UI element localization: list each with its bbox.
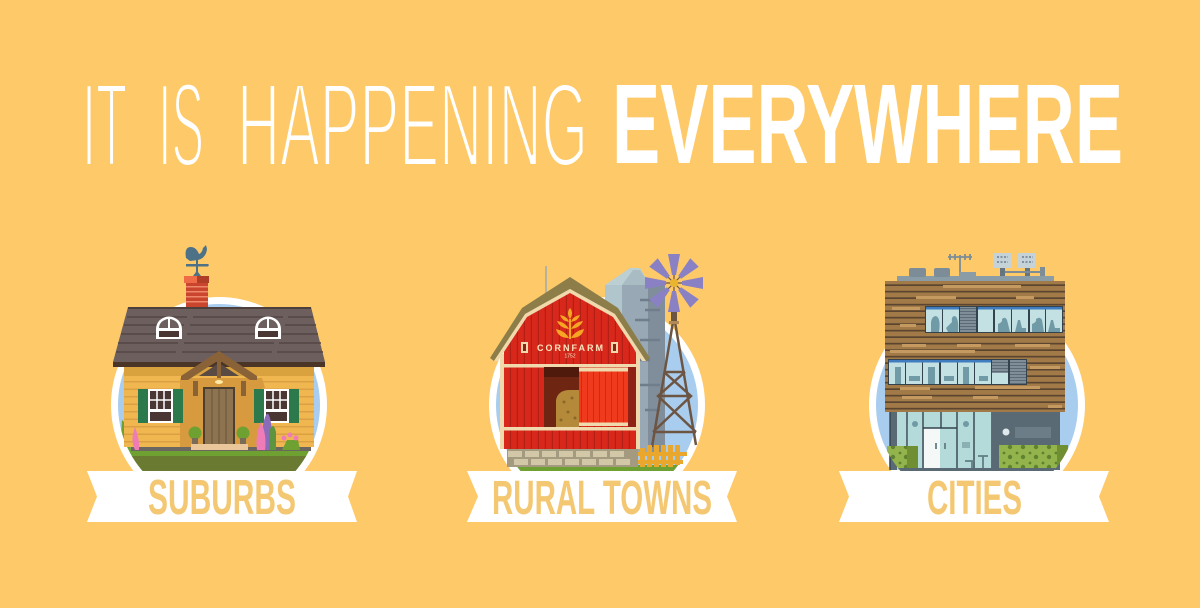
left window <box>138 389 183 423</box>
building wood cladding <box>885 281 1065 412</box>
title: thin words <box>82 59 588 192</box>
barn date: 1752 <box>564 354 576 360</box>
title: thin words: HAPPENING <box>237 59 588 192</box>
rooftop equipment <box>897 253 1054 282</box>
wheat logo <box>556 308 584 339</box>
barn body <box>504 290 636 449</box>
windmill tower <box>652 312 696 447</box>
barn name: CORNFARM <box>537 343 603 353</box>
panel: rural towns <box>467 254 737 525</box>
label: RURAL TOWNS <box>492 472 712 525</box>
dormer windows <box>156 316 281 339</box>
ground floor glass <box>889 412 992 470</box>
right window <box>254 389 299 423</box>
banner <box>839 471 1109 522</box>
icon: lightning rod <box>545 266 547 294</box>
grass <box>517 465 678 471</box>
title: thin words: IT <box>82 59 127 192</box>
barn trim <box>500 352 640 449</box>
panel: cities <box>839 253 1109 525</box>
title <box>82 59 1123 192</box>
ground floor dark panel <box>992 412 1060 470</box>
barn small windows <box>521 342 618 353</box>
banner <box>87 471 357 522</box>
porch <box>180 351 265 447</box>
path and foundation <box>131 444 311 451</box>
panel: suburbs <box>87 245 357 525</box>
barn opening with hay <box>544 367 579 427</box>
ring and sky <box>489 297 705 513</box>
label: CITIES <box>927 472 1022 525</box>
icon: weathervane <box>186 245 209 276</box>
label: SUBURBS <box>148 471 296 525</box>
silo <box>605 268 665 452</box>
banner <box>467 471 737 522</box>
ring and sky <box>869 297 1085 513</box>
ground <box>121 420 309 471</box>
windmill blades <box>645 254 703 312</box>
stone foundation <box>507 449 638 467</box>
front door <box>203 387 235 444</box>
fence <box>638 445 687 467</box>
title: thin words: IS <box>158 59 204 192</box>
middle windows <box>888 359 1027 385</box>
barn sliding door <box>579 367 636 427</box>
shrubs and flowers <box>132 414 300 450</box>
icon: chimney <box>184 276 209 307</box>
house wall <box>124 367 314 447</box>
house roof <box>113 307 325 367</box>
upper windows <box>925 306 1063 333</box>
ring and sky <box>111 297 327 513</box>
hedges <box>880 445 1070 472</box>
barn roof <box>490 277 650 361</box>
